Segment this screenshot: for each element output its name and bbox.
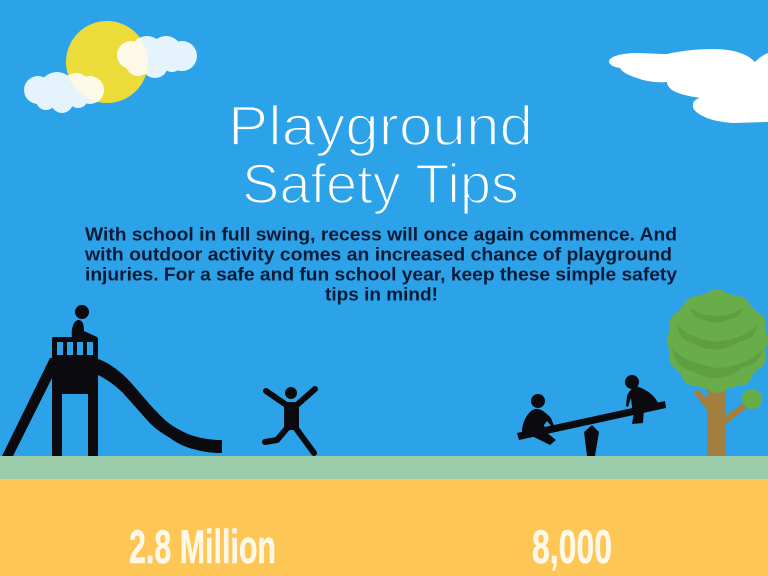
icon: jumping child xyxy=(265,387,315,453)
intro text xyxy=(84,224,678,304)
title xyxy=(228,94,533,215)
tree trunk xyxy=(693,385,748,456)
sky background xyxy=(0,0,768,456)
intro text: with outdoor activity comes an increased chance of playground xyxy=(84,244,672,264)
stat: 2.8 Million: 2.8 Million xyxy=(129,520,276,573)
ground strip xyxy=(0,456,768,479)
icon: large cloud top right xyxy=(609,49,768,123)
canopy shading xyxy=(672,307,762,378)
icon: cloud upper right xyxy=(117,36,197,78)
sand panel xyxy=(0,479,768,576)
stat: 8,000: 8,000 xyxy=(532,520,612,573)
title: Playground xyxy=(228,94,533,157)
tree small foliage xyxy=(742,389,762,409)
icon: seesaw with children xyxy=(517,375,666,456)
tree canopy xyxy=(667,289,768,393)
title: Safety Tips xyxy=(242,152,519,215)
icon: sun xyxy=(66,21,148,103)
icon: cloud lower left xyxy=(24,72,104,113)
intro text: injuries. For a safe and fun school year, keep these simple safety xyxy=(85,264,678,284)
intro text: tips in mind! xyxy=(325,284,438,304)
icon: slide with child xyxy=(2,305,222,456)
icon: tree xyxy=(667,289,768,456)
intro text: With school in full swing, recess will once again commence. And xyxy=(85,224,677,244)
